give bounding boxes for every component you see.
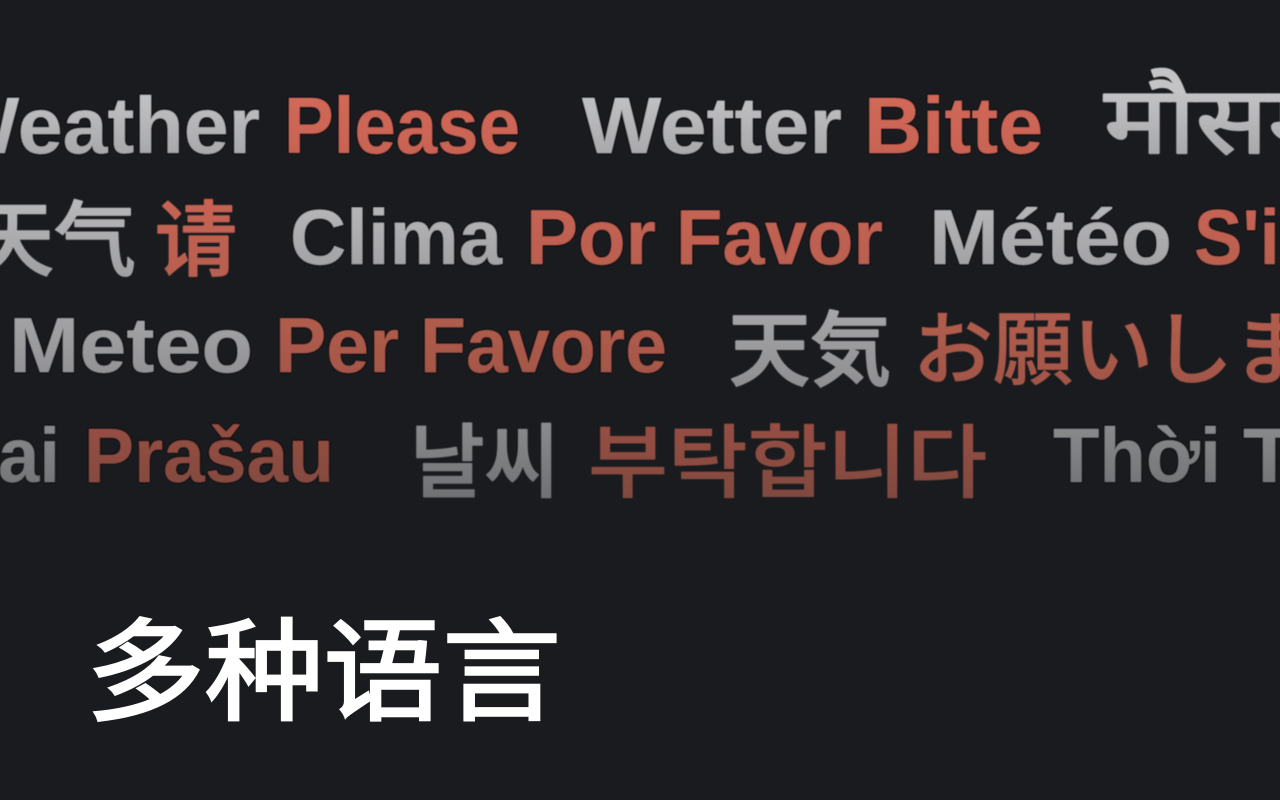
phrase: Por: Por [526,193,656,281]
title: 多种语言 [86,582,561,743]
phrase: Thời: Thời [1053,413,1221,499]
phrase: Météo: Météo [929,193,1172,281]
phrase: Bitte: Bitte [864,81,1043,170]
phrase: Wetter: Wetter [582,81,842,170]
phrase row 1 [0,68,1280,173]
phrase: Chinese please: 请 [155,174,237,293]
phrase: Korean please: 부탁합니다 [588,399,987,515]
phrase: Prašau: Prašau [84,413,334,499]
phrase: Per: Per [275,301,399,389]
phrase row 4 [0,398,1280,515]
phrase row 2 [0,174,1280,293]
phrase: Meteo: Meteo [9,301,253,389]
phrase: Japanese weather: 天気 [729,286,891,403]
phrase: Favore: Favore [420,301,667,389]
phrase row 3 [9,286,1280,403]
phrase: Favor: Favor [676,193,883,281]
phrase: Clima: Clima [290,193,503,281]
phrase: Please: Please [284,81,520,170]
phrase: Korean weather: 날씨 [410,398,559,515]
phrase rows [0,68,1280,515]
